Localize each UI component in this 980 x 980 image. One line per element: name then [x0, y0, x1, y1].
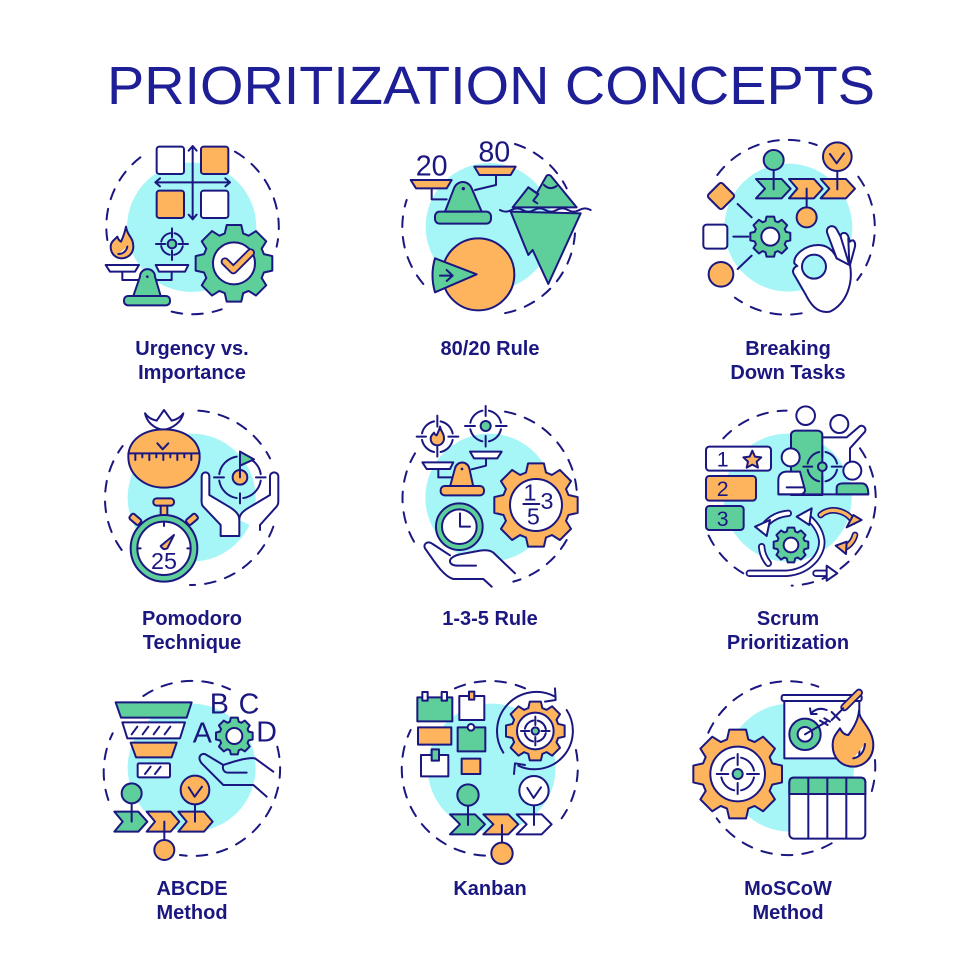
icon: gear [216, 718, 253, 754]
icon: kanban cards [417, 692, 485, 776]
panel: moscow method icon [693, 681, 875, 855]
label: scrum prioritization: Scrum [757, 608, 819, 630]
panel: scrum prioritization icon [706, 406, 876, 586]
icon: funnel [116, 702, 192, 777]
panel: breaking down tasks icon [703, 140, 875, 315]
icon: gear with numbers: 5 [527, 504, 540, 530]
icon: flame [111, 227, 133, 258]
text: letters A B C D: C [239, 688, 259, 720]
icon: sprint cycle with gear [749, 508, 837, 581]
icon: open hand [200, 754, 273, 797]
icon: balance scale [422, 452, 502, 495]
icon: priority matrix [155, 146, 230, 219]
icon: balance scale [411, 167, 516, 224]
label: 1-3-5 rule: 1-3-5 Rule [442, 608, 538, 630]
icon: ok hand [793, 226, 855, 312]
icon: hands with flag target [202, 452, 278, 536]
panel: pomodoro technique icon [105, 410, 278, 585]
label: pomodoro technique: Technique [143, 632, 241, 654]
icon: clock [436, 503, 483, 550]
text: letters A B C D [193, 688, 277, 750]
icon: gear with target [693, 730, 782, 818]
text: letters A B C D: A [193, 718, 213, 750]
text: 20: 20 [416, 151, 448, 183]
label: breaking down tasks: Breaking [745, 338, 831, 360]
icon: tomato timer [128, 410, 200, 488]
icon: flame [833, 711, 873, 767]
text: letters A B C D: B [210, 688, 229, 720]
icon: presentation board with target [782, 695, 862, 758]
icon: dot target [465, 406, 507, 447]
text: 80: 80 [478, 137, 510, 169]
icon: flame target [417, 416, 458, 457]
label: abcde method: Method [156, 902, 228, 924]
icon: process chevrons [450, 776, 552, 864]
panel: abcde method icon [104, 681, 280, 860]
list: ranked rows [706, 447, 771, 531]
label: urgency vs importance: Importance [138, 362, 246, 384]
icon: process chevrons [756, 142, 855, 227]
panel: 80/20 rule icon [402, 137, 591, 314]
icon: stopwatch: 25 [151, 548, 177, 574]
title: PRIORITIZATION CONCEPTS [107, 56, 875, 116]
label: 80/20 rule: 80/20 Rule [441, 338, 539, 360]
label: moscow method: MoSCoW [744, 878, 832, 900]
label: scrum prioritization: Prioritization [727, 632, 849, 654]
label: breaking down tasks: Down Tasks [730, 362, 846, 384]
icon: open hand [424, 543, 515, 587]
label: moscow method: Method [752, 902, 824, 924]
icon: team with target [778, 406, 868, 495]
icon: shapes connected to gear [703, 182, 790, 287]
icon: target [156, 228, 188, 260]
icon: cycling gear with target [497, 688, 573, 774]
panel: kanban icon [402, 681, 578, 864]
label: pomodoro technique: Pomodoro [142, 608, 242, 630]
icon: stopwatch [129, 498, 199, 582]
icon: pencil [840, 693, 859, 712]
label: kanban: Kanban [453, 878, 527, 900]
panel: urgency vs importance icon [106, 146, 279, 314]
icon: process chevrons [114, 776, 213, 860]
list: ranked rows: 3 [717, 507, 729, 531]
icon: gear with numbers: 1 [523, 480, 536, 506]
label: abcde method: ABCDE [156, 878, 228, 900]
label: urgency vs importance: Urgency vs. [135, 338, 249, 360]
icon: balance scale [106, 265, 188, 305]
icon: pie chart [432, 238, 514, 310]
icon: gear with numbers [494, 463, 578, 547]
icon: orange arrows [821, 510, 862, 554]
icon: iceberg [500, 175, 591, 284]
icon: gear with check [196, 225, 272, 302]
icon: table [789, 778, 865, 839]
text: letters A B C D: D [256, 717, 277, 749]
list: ranked rows: 2 [717, 477, 729, 501]
icon: gear with numbers: 3 [540, 488, 553, 514]
list: ranked rows: 1 [717, 448, 729, 472]
panel: 1-3-5 rule icon [403, 406, 578, 587]
